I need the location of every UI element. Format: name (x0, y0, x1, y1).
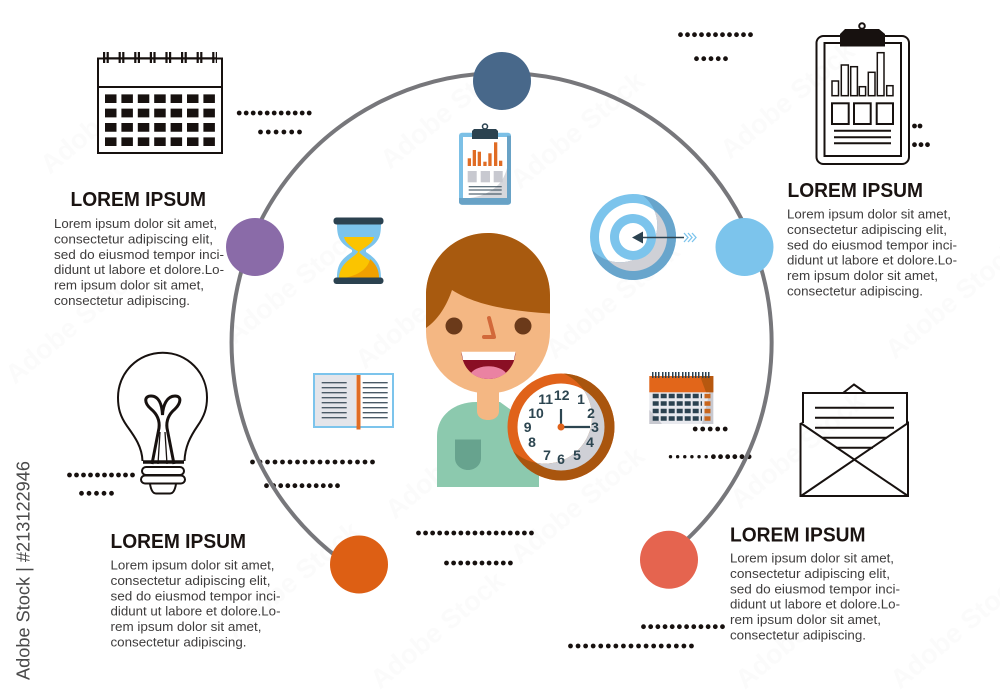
faint stock watermarks: Adobe Stock (0, 260, 146, 390)
text block: bottom left (110, 531, 280, 650)
stock id side label: Adobe Stock | #213122946 (14, 461, 34, 680)
text block: top right: didunt ut labore et dolore.Lo- (787, 253, 957, 268)
node: orange bottom left (330, 536, 388, 594)
icon: coloured calendar (649, 375, 713, 424)
faint stock watermarks: Adobe Stock (35, 50, 181, 180)
icon: hourglass (334, 218, 384, 284)
text block: bottom left: consectetur adipiscing. (110, 634, 246, 650)
text block: bottom right: rem ipsum dolor sit amet, (730, 612, 881, 627)
icon: outline light bulb (118, 353, 207, 494)
icon: open book (314, 374, 393, 430)
icon: wall clock: 7 (543, 447, 551, 463)
icon: wall clock: 4 (586, 434, 594, 450)
faint stock watermarks: Adobe Stock (365, 565, 511, 695)
text block: top left (54, 189, 224, 308)
icon: wall clock: 5 (573, 447, 581, 463)
text block: bottom right: consectetur adipiscing. (730, 628, 866, 642)
shirt pocket (455, 440, 481, 470)
text block: top left: sed do eiusmod tempor inci- (54, 247, 224, 262)
text block: bottom left: sed do eiusmod tempor inci- (110, 588, 280, 603)
body (437, 402, 539, 487)
icon: wall clock: 6 (557, 451, 565, 467)
icon: target with arrow (590, 194, 696, 280)
text block: top right: LOREM IPSUM (788, 180, 923, 202)
faint stock watermarks: Adobe Stock (730, 565, 876, 695)
eyes (446, 318, 532, 334)
text block: bottom right: LOREM IPSUM (730, 525, 866, 547)
faint stock watermarks: Adobe Stock (505, 440, 651, 570)
mouth (462, 352, 516, 379)
icon: wall clock: 8 (528, 434, 536, 450)
icon: wall clock: 9 (524, 419, 532, 435)
faint stock watermarks: Adobe Stock (220, 220, 366, 350)
text block: bottom left: LOREM IPSUM (110, 531, 246, 553)
node: purple left (226, 218, 284, 276)
faint stock watermarks: Adobe Stock (505, 65, 651, 195)
text block: bottom left: didunt ut labore et dolore.Lo- (110, 604, 280, 619)
face (426, 233, 550, 394)
text block: bottom right (730, 525, 900, 642)
text block: top right: Lorem ipsum dolor sit amet, (787, 206, 951, 222)
dotted decorative leader lines (70, 35, 928, 646)
faint stock watermarks: Adobe Stock (540, 235, 686, 365)
faint stock watermarks: Adobe Stock (375, 45, 521, 175)
text block: bottom left: consectetur adipiscing elit, (110, 573, 270, 588)
text block: top left: consectetur adipiscing. (54, 293, 190, 308)
text block: top right: rem ipsum dolor sit amet, (787, 268, 938, 283)
icon: coloured clipboard (459, 124, 511, 205)
icon: wall clock: 1 (577, 391, 585, 407)
text block: top right: consectetur adipiscing elit, (787, 222, 947, 237)
text block: top left: consectetur adipiscing elit, (54, 231, 213, 246)
icon: wall clock: 2 (587, 405, 595, 421)
node: light blue right (716, 218, 774, 276)
text block: top right: sed do eiusmod tempor inci- (787, 237, 957, 252)
text block: bottom right: sed do eiusmod tempor inci- (730, 581, 900, 596)
icon: wall clock (508, 374, 614, 480)
text block: top left: Lorem ipsum dolor sit amet, (54, 216, 217, 231)
icon: wall clock: 12 (554, 387, 570, 403)
central ring arc (232, 73, 772, 570)
faint stock watermarks: Adobe Stock (380, 395, 526, 525)
text block: bottom left: Lorem ipsum dolor sit amet, (110, 558, 274, 572)
node: coral bottom right (640, 531, 698, 589)
text block: bottom right: didunt ut labore et dolore.Lo- (730, 597, 900, 612)
text block: top left: didunt ut labore et dolore.Lo- (54, 262, 224, 277)
icon: outline envelope with letter (800, 384, 908, 496)
node: dark blue top (473, 52, 531, 110)
icon: wall clock: 10 (528, 405, 544, 421)
text block: top right: consectetur adipiscing. (787, 284, 923, 298)
icon: outline clipboard with chart (816, 23, 909, 164)
faint stock watermarks: Adobe Stock (350, 245, 496, 375)
text block: bottom left: rem ipsum dolor sit amet, (110, 619, 262, 634)
icon: wall clock: 3 (591, 419, 599, 435)
faint stock watermarks: Adobe Stock (725, 385, 871, 515)
icon: wall clock: 11 (538, 391, 553, 407)
text block: top left: LOREM IPSUM (70, 189, 206, 211)
character: smiling man (426, 233, 550, 487)
text block: bottom right: Lorem ipsum dolor sit amet, (730, 550, 894, 566)
hair (426, 233, 550, 328)
neck (477, 385, 499, 420)
text block: top right (787, 180, 957, 298)
text block: bottom right: consectetur adipiscing elit, (730, 566, 890, 581)
nose (484, 318, 494, 337)
text block: top left: rem ipsum dolor sit amet, (54, 278, 204, 293)
faint stock watermarks: Adobe Stock (220, 515, 366, 645)
icon: outline calendar (98, 58, 222, 153)
faint stock watermarks: Adobe Stock (715, 35, 861, 165)
